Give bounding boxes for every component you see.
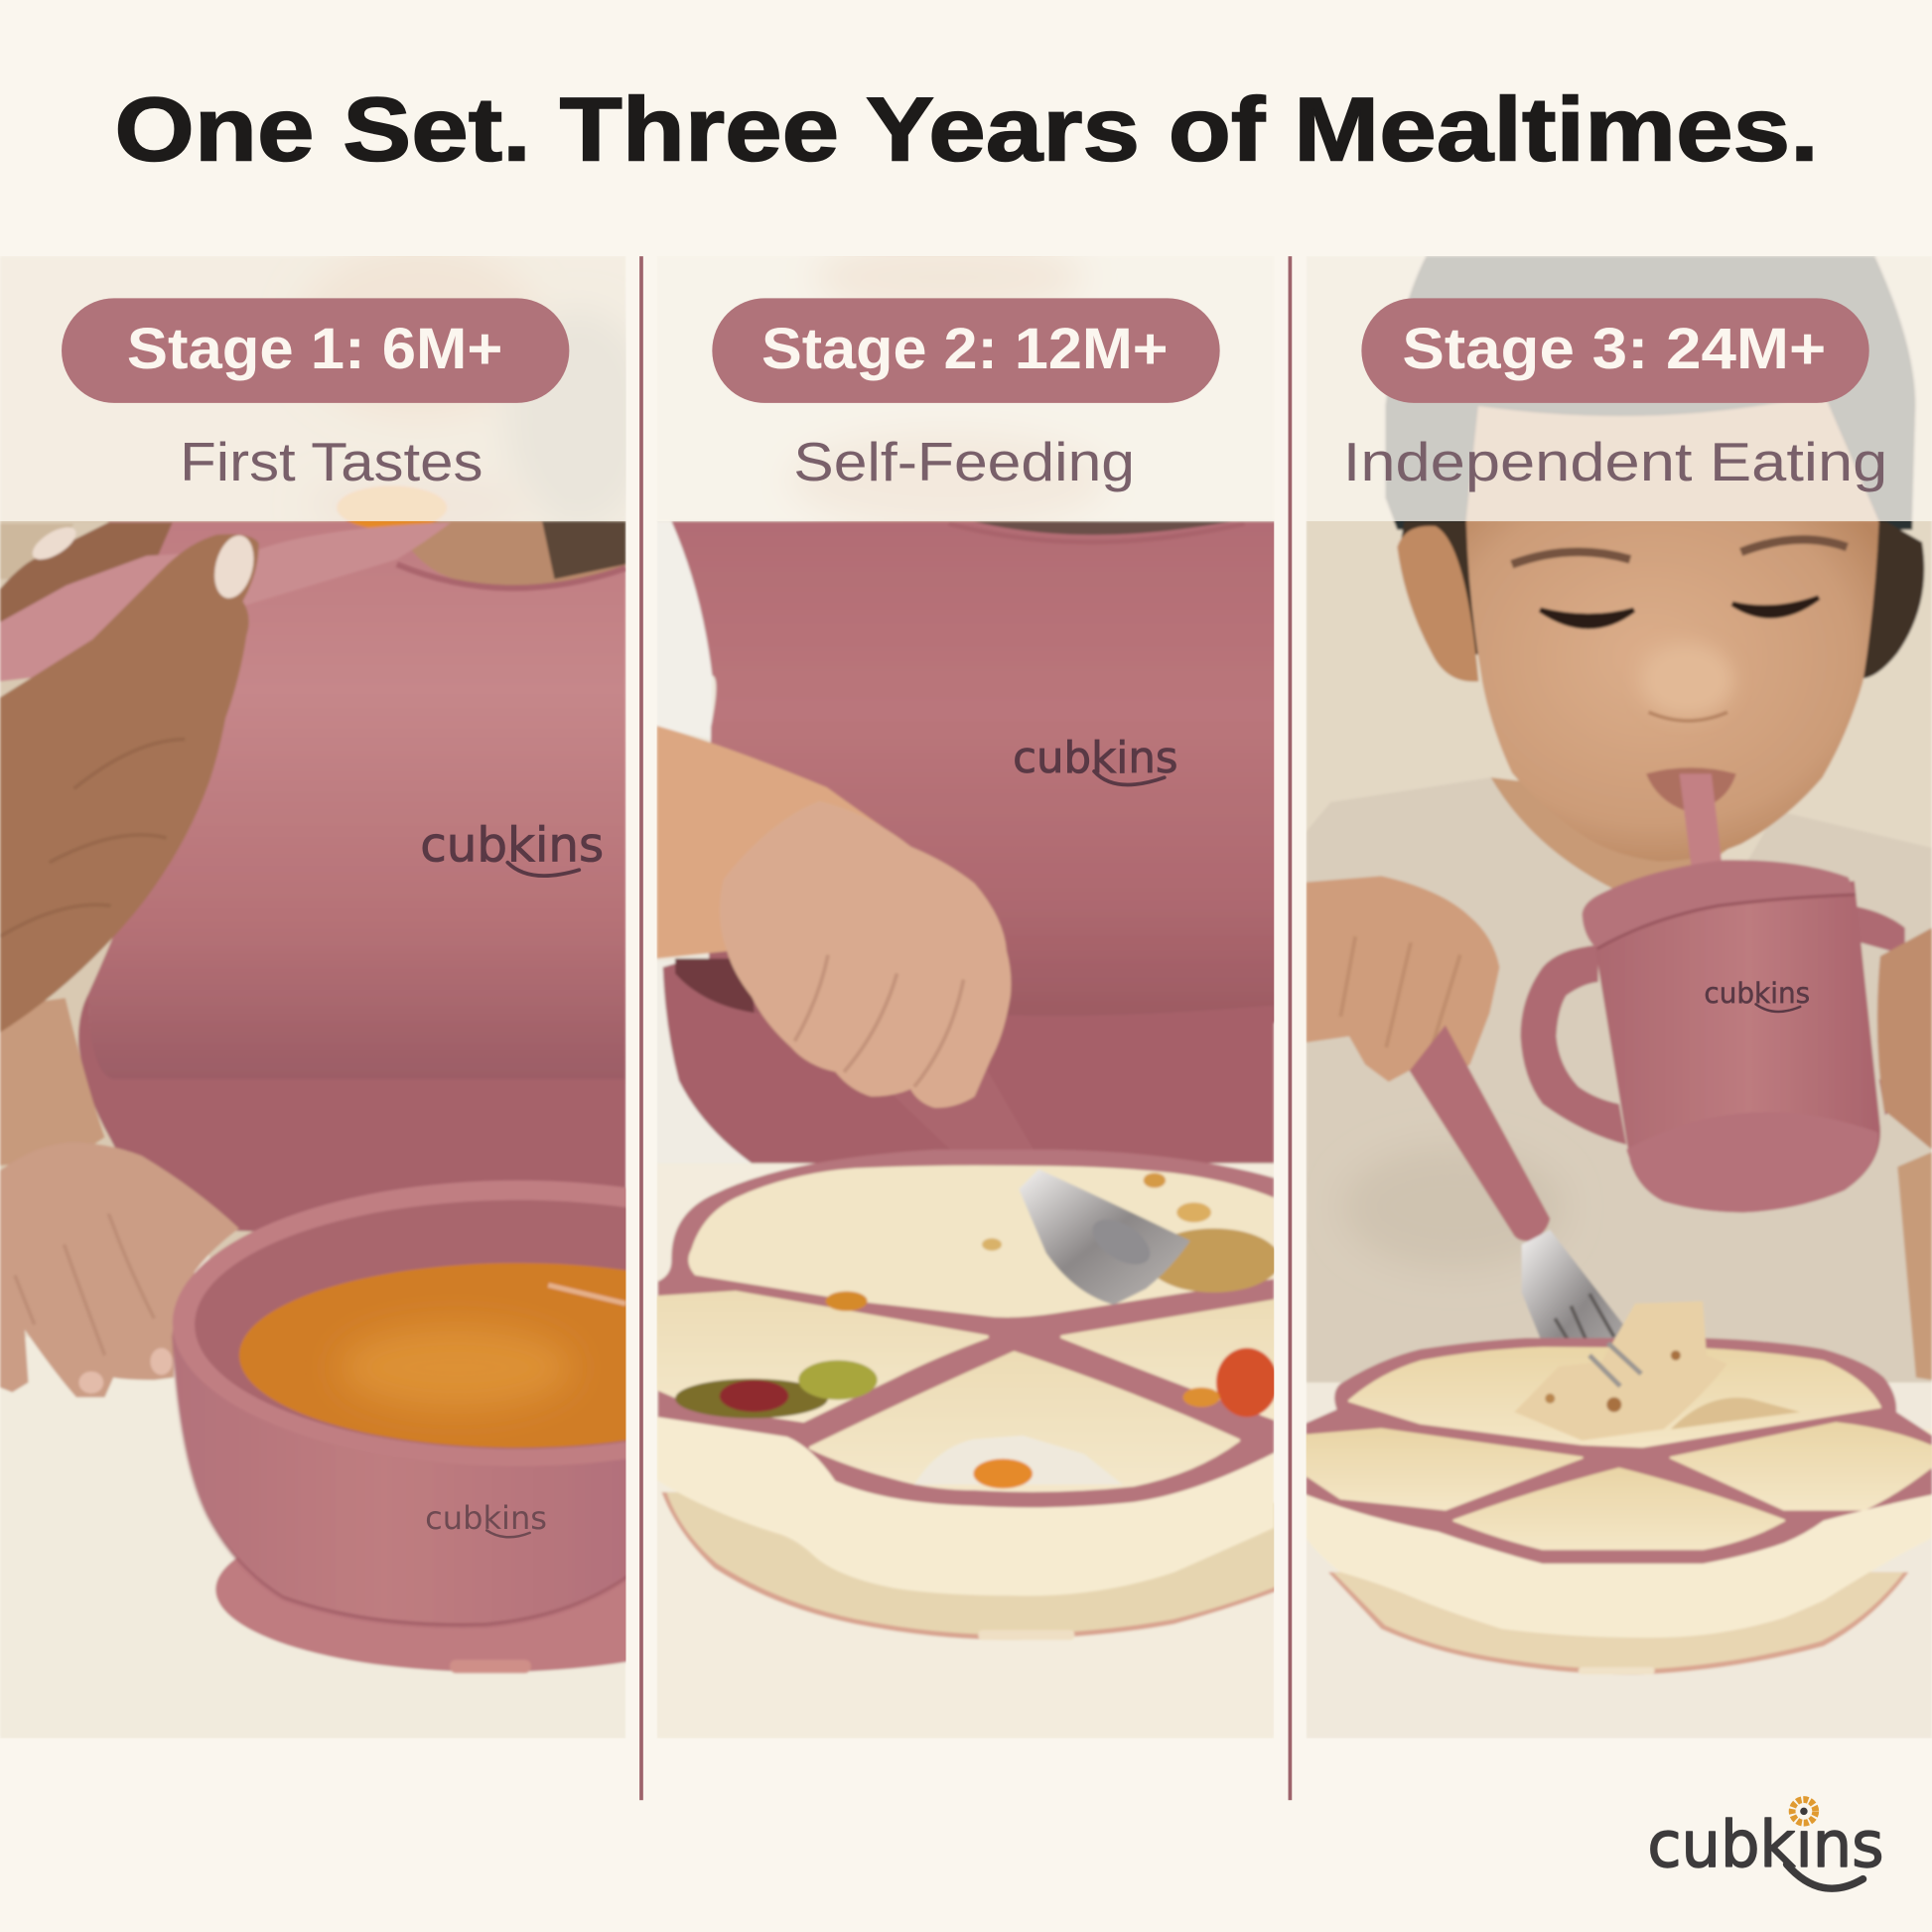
stage 2 pill — [712, 298, 1220, 403]
panel: stage 2 self-feeding — [656, 240, 1282, 1738]
divider — [1289, 256, 1292, 1800]
stage 1 pill — [62, 298, 569, 403]
stage 1 pill: Stage 1: 6M+ — [127, 317, 502, 381]
photo: bib, hand, spoon and divided plate — [656, 240, 1282, 1738]
overlay band: stage 2 — [656, 256, 1274, 521]
overlay band: stage 1 — [0, 256, 625, 521]
logo on cup: cubkins — [1704, 977, 1810, 1010]
logo on bowl: cubkins — [425, 1499, 547, 1537]
photo: bib, bowl and feeding hand — [0, 256, 625, 1738]
panel: stage 3 independent eating — [1307, 256, 1932, 1738]
icon: lion face — [1789, 1796, 1819, 1826]
stage 3 pill: Stage 3: 24M+ — [1402, 317, 1826, 381]
stage 2 pill: Stage 2: 12M+ — [761, 317, 1169, 381]
cubkins logo: cubkins — [1647, 1808, 1884, 1882]
panel: stage 1 first tastes — [0, 256, 625, 1738]
logo on bib: cubkins — [420, 818, 604, 874]
photo: toddler with straw cup, fork and plate — [1307, 256, 1932, 1738]
divider — [639, 256, 643, 1800]
logo smile — [1787, 1864, 1863, 1888]
logo on bib: cubkins — [1013, 734, 1177, 783]
title: One Set. Three Years of Mealtimes. — [114, 79, 1819, 180]
stage 3 subtitle: Independent Eating — [1343, 432, 1887, 492]
stage 3 pill — [1361, 298, 1869, 403]
stage 1 subtitle: First Tastes — [180, 432, 483, 492]
overlay band: stage 3 — [1307, 256, 1932, 521]
stage 2 subtitle: Self-Feeding — [793, 432, 1135, 492]
